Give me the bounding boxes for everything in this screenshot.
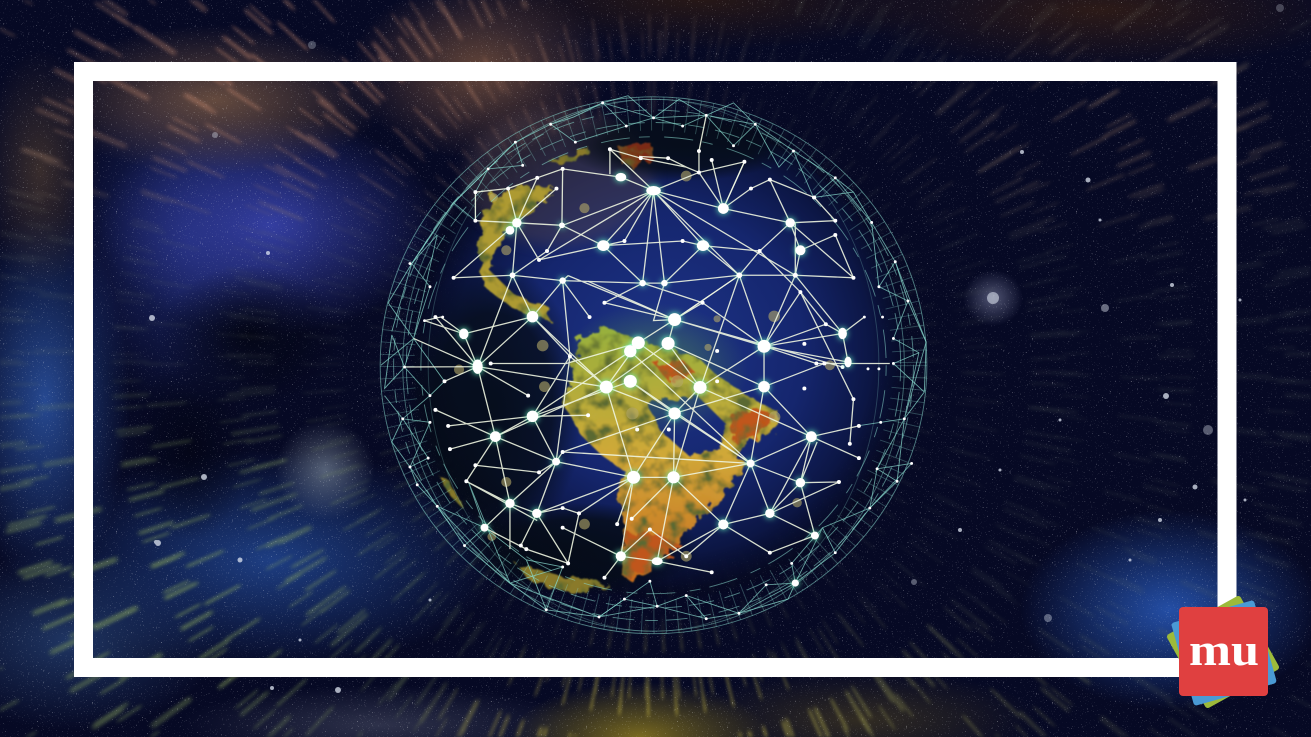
white frame bbox=[84, 72, 1227, 668]
logo: wordmark: mu bbox=[1189, 624, 1259, 675]
globe bbox=[380, 96, 927, 634]
logo: mu bbox=[1166, 595, 1280, 709]
globe: dark lower side bbox=[461, 503, 701, 596]
globe: top dim haze bbox=[465, 110, 654, 246]
globe: ghost nodes bbox=[454, 171, 835, 562]
globe: large glowing hub nodes bbox=[459, 173, 852, 587]
globe: dark night side bbox=[403, 264, 584, 549]
globe: earth sphere bbox=[399, 115, 908, 615]
globe: network links bbox=[405, 115, 890, 578]
globe: outer lattice shell bbox=[380, 96, 927, 634]
logo: green card bbox=[1166, 595, 1280, 709]
globe: top dark cap bbox=[563, 110, 795, 181]
globe: continents bbox=[439, 142, 781, 592]
logo: red card bbox=[1179, 607, 1268, 696]
globe: green glow over land bbox=[559, 303, 748, 438]
globe: small network nodes bbox=[403, 103, 912, 619]
logo: blue card bbox=[1171, 600, 1277, 706]
